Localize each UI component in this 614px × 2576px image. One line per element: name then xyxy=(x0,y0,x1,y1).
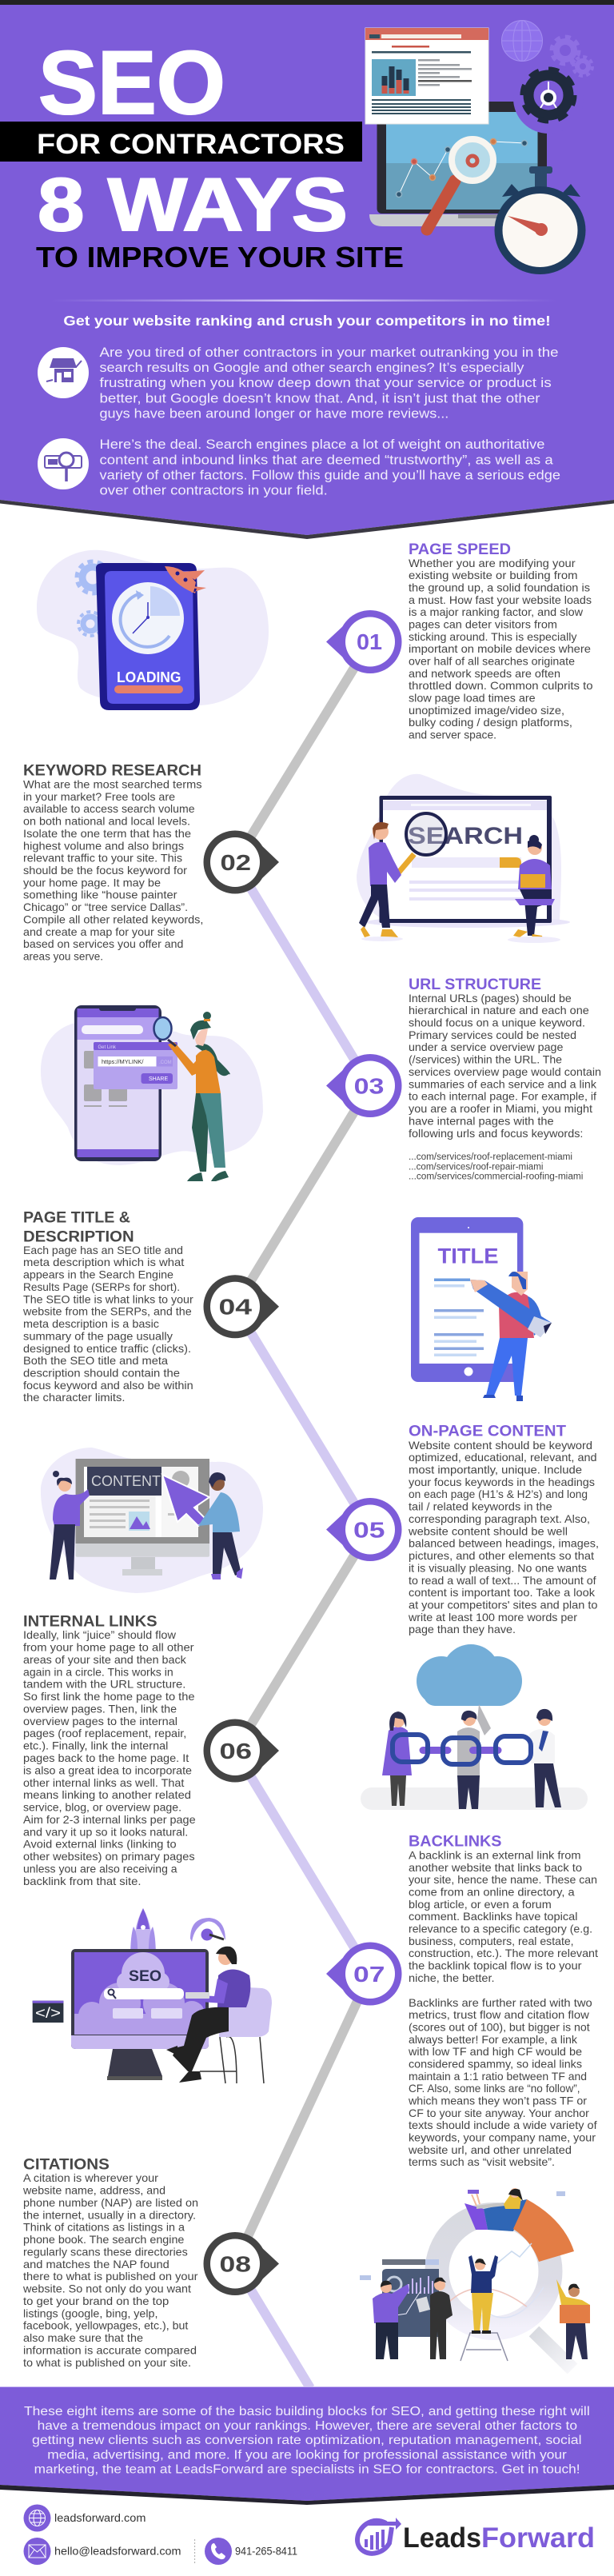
text: citations: also make sure that the xyxy=(23,2331,143,2344)
woman xyxy=(382,1711,412,1806)
text: backlinks: terms such as “visit website”. xyxy=(409,2155,555,2168)
title: 8 WAYS xyxy=(38,162,348,246)
node 03 xyxy=(326,1054,401,1117)
get link card xyxy=(94,1042,177,1089)
icon: globe xyxy=(502,21,542,61)
node 02 xyxy=(203,830,279,894)
text: keyword research: highest volume and also brings xyxy=(23,839,184,852)
text: backlinks: metrics, trust flow and citation flow xyxy=(409,2008,590,2021)
illustration: title tablet xyxy=(411,1217,552,1401)
node 04: 04 xyxy=(219,1295,253,1320)
logo: Forward xyxy=(481,2522,595,2554)
title: TO IMPROVE YOUR SITE xyxy=(36,241,404,274)
text: on-page content: most importantly, unique. Include xyxy=(409,1464,582,1476)
text: page title and description: DESCRIPTION xyxy=(23,1228,134,1246)
text: page speed: important on mobile devices where xyxy=(409,642,591,655)
illustration: content monitor: CONTENT xyxy=(91,1473,161,1489)
contact: email xyxy=(24,2538,181,2565)
text: backlinks: (scores out of 100), but bigger is not xyxy=(409,2020,590,2033)
text: page title and description: appears in the Search Engine xyxy=(23,1268,173,1281)
text: url structure: to each internal page. For example, if xyxy=(409,1090,596,1103)
text: keyword research: Chicago” or “tree service Dallas”. xyxy=(23,901,188,913)
text: backlinks: considered spammy, so ideal links xyxy=(409,2057,582,2070)
text: page speed: throttled down. Common culprits to xyxy=(409,679,593,692)
text: page speed: existing website or building from xyxy=(409,569,577,581)
text: backlinks: CF to your site anyway. Your anchor xyxy=(409,2107,589,2119)
text: internal links: Ideally, link “juice” should flow xyxy=(23,1628,177,1641)
text: page title and description: Each page has an SEO title and xyxy=(23,1244,183,1256)
text: url structure: hierarchical in nature and each one xyxy=(409,1004,589,1016)
text: backlinks: the backlink topical flow is to your xyxy=(409,1959,582,1972)
intro paragraph one: guys have been around longer or have more reviews... xyxy=(99,406,449,421)
text: url structure: should focus on a unique keyword. xyxy=(409,1016,585,1028)
analytics window xyxy=(365,28,488,124)
person with laptop xyxy=(508,835,560,943)
node 02: 02 xyxy=(221,850,251,875)
magnifier handle xyxy=(534,2331,572,2369)
woman on top xyxy=(468,2188,523,2209)
contact: website: leadsforward.com xyxy=(54,2512,146,2524)
illustration: page speed phone: LOADING xyxy=(117,669,181,685)
closing text: marketing, the team at LeadsForward are specialists in SEO for contractors. Get in touch! xyxy=(34,2463,580,2477)
text: on-page content: on each page (H1’s & H2’s) and long xyxy=(409,1488,588,1500)
text: citations: and matches the NAP found xyxy=(23,2258,169,2270)
text: internal links: overview pages. Then, link the xyxy=(23,1702,177,1715)
contact: email: hello@leadsforward.com xyxy=(54,2545,181,2558)
text: url structure: (/services) within the URL. The xyxy=(409,1053,562,1066)
text: page speed: is a major ranking factor, and slow xyxy=(409,605,584,618)
text: keyword research: your home page. It may be xyxy=(23,876,161,889)
text: keyword research xyxy=(23,761,203,963)
title: FOR CONTRACTORS xyxy=(37,129,345,160)
text: page title and description: description should contain the xyxy=(23,1366,180,1379)
illustration: title tablet: TITLE xyxy=(438,1244,499,1268)
person with magnifier xyxy=(359,822,403,941)
contact: phone: 941-265-8411 xyxy=(235,2545,297,2558)
code tile: </> xyxy=(35,2005,61,2021)
line graph on laptop xyxy=(397,139,528,197)
illustration: chain of links with cloud xyxy=(361,1644,588,1810)
closing text: These eight items are some of the basic building blocks for SEO, and getting these right will xyxy=(24,2405,590,2418)
text: url structure: summaries of each service and a link xyxy=(409,1077,597,1090)
text: on-page content: at your competitors' sites and plan to xyxy=(409,1598,598,1611)
magnifier xyxy=(427,139,493,230)
text: url structure: ...com/services/commercial-roofing-miami xyxy=(409,1172,583,1182)
text: url structure: following urls and focus keywords: xyxy=(409,1127,583,1140)
text: on-page content: write at least 100 more words per xyxy=(408,1611,577,1623)
illustration: analytics ring and team xyxy=(360,2188,590,2369)
text: page speed: slow page load times are xyxy=(409,691,536,704)
monitor xyxy=(71,1949,209,2049)
intro paragraph one: better, but Google doesn’t know that. And, it isn’t just that the other xyxy=(99,391,540,405)
text: citations: website name, address, and xyxy=(22,2184,165,2197)
cursor xyxy=(162,1475,209,1526)
magnifier xyxy=(154,1017,176,1046)
illustration: content monitor xyxy=(41,1448,263,1593)
text: page speed: pages can deter visitors from xyxy=(409,617,557,630)
text: internal links xyxy=(23,1613,196,1887)
text: url structure: have internal pages with the xyxy=(409,1114,554,1127)
text: backlinks: blog article, or even a forum xyxy=(409,1898,552,1911)
text: backlinks: website url, and other unrelated xyxy=(408,2143,572,2156)
text: on-page content: balanced between headings, images, xyxy=(409,1537,599,1550)
text: page speed: bulky coding / design platforms, xyxy=(409,716,572,729)
get link card: Get Link xyxy=(98,1045,117,1050)
text: backlinks: maintain a 1:1 ratio between TF and xyxy=(409,2070,587,2083)
text: page speed: sticking around. This is especially xyxy=(409,630,577,643)
intro headline: Get your website ranking and crush your competitors in no time! xyxy=(63,313,551,329)
text: page title and description: focus keyword and also be within xyxy=(23,1379,193,1392)
chain links xyxy=(393,1735,531,1764)
node 05 xyxy=(326,1498,401,1561)
text: page title and description: the character limits. xyxy=(23,1391,125,1404)
text: backlinks: which means they won’t pass TF or xyxy=(408,2094,587,2107)
text: backlinks: business, computers, real estate, xyxy=(409,1935,574,1947)
clouds xyxy=(74,1983,205,2035)
text: internal links: backlink from that site. xyxy=(23,1875,142,1887)
text: keyword research: KEYWORD RESEARCH xyxy=(23,761,201,779)
node 05: 05 xyxy=(353,1518,385,1542)
text: backlinks: your site, hence the name. These can xyxy=(409,1873,597,1886)
illustration: SEO rocket monitor: SEO xyxy=(129,1968,161,1985)
presenter in purple xyxy=(373,2281,409,2359)
panel: header background xyxy=(0,0,614,539)
intro paragraph two: content and inbound links that are deemed “trustworthy”, as well as a xyxy=(99,453,554,467)
divider xyxy=(51,299,556,302)
text: url structure: you are a roofer in Miami, you might xyxy=(409,1102,592,1115)
text: url structure: URL STRUCTURE xyxy=(409,976,541,993)
node 03: 03 xyxy=(354,1073,384,1099)
laptop xyxy=(369,102,547,226)
logo: Leads xyxy=(403,2522,481,2554)
text: url structure: services overview page would contain xyxy=(409,1065,601,1078)
text: page speed: unoptimized image/video size, xyxy=(409,704,564,717)
person with orange box xyxy=(556,2279,590,2359)
text: on-page content: to read a wall of text... The amount of xyxy=(409,1574,596,1587)
text: citations: listings (google, bing, yelp, xyxy=(23,2306,158,2319)
text: keyword research: based on services you offer and xyxy=(23,937,183,950)
text: citations: the internet, usually in a directory. xyxy=(23,2208,196,2221)
get link card: SHARE xyxy=(149,1076,168,1082)
text: internal links: overview pages to the internal xyxy=(23,1715,177,1727)
logo xyxy=(357,2518,595,2554)
text: citations: to get your brand on the top xyxy=(23,2294,169,2307)
text: keyword research: on both national and local levels. xyxy=(23,815,190,828)
node 07: 07 xyxy=(353,1962,385,1987)
text: citations: phone number (NAP) are listed on xyxy=(23,2196,198,2209)
text: citations: A citation is wherever your xyxy=(23,2171,158,2184)
node 06: 06 xyxy=(219,1739,252,1763)
text: backlinks: texts should include a wide variety of xyxy=(409,2119,597,2131)
text: citations: facebook, yellowpages, etc.), but xyxy=(23,2319,188,2332)
text: citations: to what is published on your site. xyxy=(23,2356,191,2369)
text: on-page content: optimized, educational, relevant, and xyxy=(409,1451,597,1464)
contact divider xyxy=(194,2539,196,2563)
ring xyxy=(437,2215,550,2328)
closing text: getting new clients such as conversion rate optimization, reputation management, social xyxy=(32,2434,582,2447)
text: internal links: is also a great idea to incorporate xyxy=(23,1763,192,1776)
text: internal links: Avoid external links (linking to xyxy=(23,1838,177,1851)
right man xyxy=(529,1709,561,1807)
text: page title and description: PAGE TITLE & xyxy=(23,1209,130,1227)
text: keyword research: What are the most searched terms xyxy=(23,777,201,790)
text: backlinks: with low TF and high CF would be xyxy=(408,2045,582,2058)
title: SEO xyxy=(38,33,225,133)
text: url structure: ...com/services/roof-repair-miami xyxy=(409,1162,543,1172)
text: page title and description: meta description which is what xyxy=(23,1256,185,1268)
man in suit xyxy=(416,2278,453,2359)
icon: rocket xyxy=(165,566,206,593)
text: on-page content: corresponding paragraph text. Also, xyxy=(409,1512,590,1525)
text: page speed: a must. How fast your website loads xyxy=(409,593,592,606)
text: backlinks: always better! For example, a link xyxy=(409,2033,578,2046)
contact: website xyxy=(24,2505,146,2532)
text: backlinks: comment. Backlinks have topical xyxy=(409,1910,577,1923)
text: on-page content: Website content should be keyword xyxy=(409,1439,592,1452)
icon: storefront xyxy=(38,347,89,398)
text: internal links: means linking to another related xyxy=(23,1788,191,1801)
man on ladder xyxy=(460,2255,508,2361)
text: keyword research: in your market? Free tools are xyxy=(23,790,175,803)
logo mark xyxy=(357,2518,401,2554)
node 08: 08 xyxy=(219,2252,251,2276)
text: internal links: unless you are also receiving a xyxy=(23,1862,177,1875)
text: internal links: areas of your site and then back xyxy=(23,1653,187,1666)
text: internal links: again in a circle. This works in xyxy=(23,1665,173,1678)
intro paragraph two: over other contractors in your field. xyxy=(99,484,328,498)
text: page speed: the ground up, a solid foundation is xyxy=(409,581,590,593)
text: backlinks: another website that links back to xyxy=(409,1861,582,1874)
text: backlinks xyxy=(408,1833,598,2168)
text: backlinks: CF. Also, some links are “no follow”, xyxy=(409,2082,580,2095)
text: page title and description: The SEO title is what links to your xyxy=(23,1292,193,1305)
text: keyword research: available to access search volume xyxy=(23,802,195,815)
person on chair xyxy=(166,1947,272,2083)
text: page title and description xyxy=(22,1209,193,1404)
closing text: have a tremendous impact on your rankings. However, there are several other factors to xyxy=(38,2419,577,2433)
intro paragraph one: frustrating when you know deep down that your service or product is xyxy=(99,376,552,390)
text: url structure xyxy=(409,976,601,1182)
text: internal links: pages back to the home page. It xyxy=(23,1751,189,1764)
intro paragraph two: variety of other factors. Follow this guide and you’ll have a serious edge xyxy=(99,469,560,483)
text: url structure: Internal URLs (pages) should be xyxy=(409,992,572,1004)
node 01: 01 xyxy=(357,629,382,654)
text: internal links: So first link the home page to the xyxy=(23,1690,195,1703)
text: backlinks: come from an online directory, a xyxy=(409,1886,575,1899)
text: page title and description: designed to entice traffic (clicks). xyxy=(23,1342,191,1355)
text: internal links: other websites) on primary pages xyxy=(23,1850,195,1863)
closing text xyxy=(24,2405,590,2477)
text: keyword research: areas you serve. xyxy=(23,950,103,963)
text: on-page content: it is visually pleasing. No one wants xyxy=(409,1561,587,1574)
text: on-page content: ON-PAGE CONTENT xyxy=(409,1423,566,1440)
text: backlinks: Backlinks are further rated with two xyxy=(409,1996,592,2009)
text: backlinks: keywords, your company name, your xyxy=(409,2131,596,2143)
text: citations: regularly scans these directories xyxy=(23,2245,188,2258)
cloud xyxy=(417,1644,522,1706)
dashboard board xyxy=(382,2259,439,2337)
intro paragraph one xyxy=(99,345,558,421)
illustration: laptop, analytics window, gear and stopwatch xyxy=(365,21,592,274)
text: page title and description: Both the SEO title and meta xyxy=(23,1354,168,1367)
right person xyxy=(198,1472,243,1580)
man with pencil xyxy=(470,1272,552,1401)
text: internal links: pages (roof replacement, repair, xyxy=(23,1727,186,1739)
rocket xyxy=(130,1908,156,1959)
gear xyxy=(513,63,584,134)
text: page title and description: Results Page (SERPs for short). xyxy=(23,1280,180,1293)
text: backlinks: BACKLINKS xyxy=(409,1833,502,1851)
text: internal links: Aim for 2-3 internal links per page xyxy=(23,1813,196,1826)
text: keyword research: relevant traffic to your site. This xyxy=(23,852,182,865)
woman with magnifier xyxy=(168,1012,230,1181)
text: citations: information is accurate compared xyxy=(23,2343,197,2356)
text: page speed: Whether you are modifying your xyxy=(409,557,576,569)
text: backlinks: construction, etc.). The more relevant xyxy=(409,1947,598,1959)
intro paragraph two xyxy=(99,437,560,498)
intro paragraph two: Here’s the deal. Search engines place a lot of weight on authoritative xyxy=(99,437,544,452)
title xyxy=(0,33,404,274)
text: on-page content: content is important too. Take a look xyxy=(409,1586,596,1599)
illustration: search browser: SEARCH xyxy=(408,823,523,849)
text: page speed xyxy=(409,541,593,741)
text: page speed: and server space. xyxy=(409,729,496,741)
text: keyword research: Isolate the one term that has the xyxy=(23,827,191,840)
text: page speed: PAGE SPEED xyxy=(409,541,511,558)
illustration: SEO rocket monitor xyxy=(33,1908,272,2083)
text: internal links: service, blog, or overview page. xyxy=(23,1801,181,1814)
text: on-page content: your focus keywords in the headings xyxy=(409,1476,595,1488)
intro paragraph one: search results on Google and other search engines? It’s especially xyxy=(99,361,524,375)
closing text: media, advertising, and more. If you are looking for professional assistance with your xyxy=(47,2448,567,2462)
text: citations: CITATIONS xyxy=(23,2155,110,2173)
text: internal links: other internal links as well. That xyxy=(23,1776,185,1789)
left person xyxy=(50,1471,90,1580)
gauge xyxy=(190,1918,225,1942)
text: page title and description: meta description is a basic xyxy=(23,1317,159,1330)
illustration: search browser xyxy=(357,774,570,943)
text: url structure: under a service overview page xyxy=(409,1040,564,1053)
text: internal links: tandem with the URL structure. xyxy=(23,1678,185,1691)
text: backlinks: relevance to a specific category (e.g. xyxy=(409,1923,592,1935)
text: internal links: INTERNAL LINKS xyxy=(23,1613,157,1631)
ring segments xyxy=(464,2199,574,2262)
intro paragraph one: Are you tired of other contractors in your market outranking you in the xyxy=(99,345,558,360)
text: citations xyxy=(22,2155,198,2369)
text: internal links: etc.). Finally, link the internal xyxy=(23,1739,168,1752)
middle person xyxy=(457,1711,480,1809)
text: citations: there to what is published on your xyxy=(23,2270,198,2282)
get link card: https://MYLINK/ xyxy=(102,1058,144,1065)
text: internal links: and vary it up so it looks natural. xyxy=(23,1825,188,1838)
get link card: .COM xyxy=(159,1060,172,1065)
text: page speed: over half of all searches originate xyxy=(409,654,575,667)
magnifier xyxy=(397,813,446,875)
text: page speed: and network speeds are often xyxy=(409,667,560,680)
code tile xyxy=(33,2001,63,2023)
text: on-page content: page than they have. xyxy=(409,1623,516,1635)
timeline connector lines xyxy=(235,641,370,2388)
stopwatch xyxy=(494,166,585,274)
node 04 xyxy=(203,1275,279,1338)
text: keyword research: should be the focus keyword for xyxy=(23,864,187,877)
text: citations: Think of citations as listings in a xyxy=(23,2221,185,2234)
node 08 xyxy=(203,2232,279,2295)
text: url structure: Primary services could be nested xyxy=(409,1028,576,1041)
contact: phone xyxy=(205,2538,297,2565)
text: keyword research: something like “house painter xyxy=(23,889,177,901)
illustration: URL phone xyxy=(41,1005,263,1181)
illustration: page speed phone xyxy=(37,550,269,710)
text: on-page content xyxy=(408,1423,599,1635)
text: url structure: ...com/services/roof-replacement-miami xyxy=(409,1152,572,1162)
text: page title and description: website from the SERPs, and the xyxy=(22,1305,192,1318)
text: internal links: from your home page to all other xyxy=(23,1641,194,1654)
text: keyword research: and create a map for your site xyxy=(23,925,175,938)
text: keyword research: Compile all other related keywords, xyxy=(23,913,203,926)
text: backlinks: A backlink is an external link from xyxy=(409,1849,580,1862)
text: page title and description: summary of the page usually xyxy=(23,1329,173,1342)
text: backlinks: niche, the better. xyxy=(409,1971,495,1984)
text: on-page content: pictures, and other elements so that xyxy=(409,1549,594,1562)
chart curves xyxy=(448,2243,544,2318)
node 07 xyxy=(326,1942,401,2006)
icon: magnifier over search bar xyxy=(38,438,89,489)
text: citations: phone book. The search engine xyxy=(23,2233,185,2246)
icon: pale gears xyxy=(552,37,592,76)
text: on-page content: tail / related keywords in the xyxy=(409,1500,552,1513)
node 06 xyxy=(203,1719,279,1782)
text: citations: website. So not only do you want xyxy=(22,2282,191,2295)
node 01 xyxy=(326,610,401,673)
text: on-page content: website content should be well xyxy=(408,1524,568,1537)
panel: closing summary xyxy=(0,2386,614,2505)
